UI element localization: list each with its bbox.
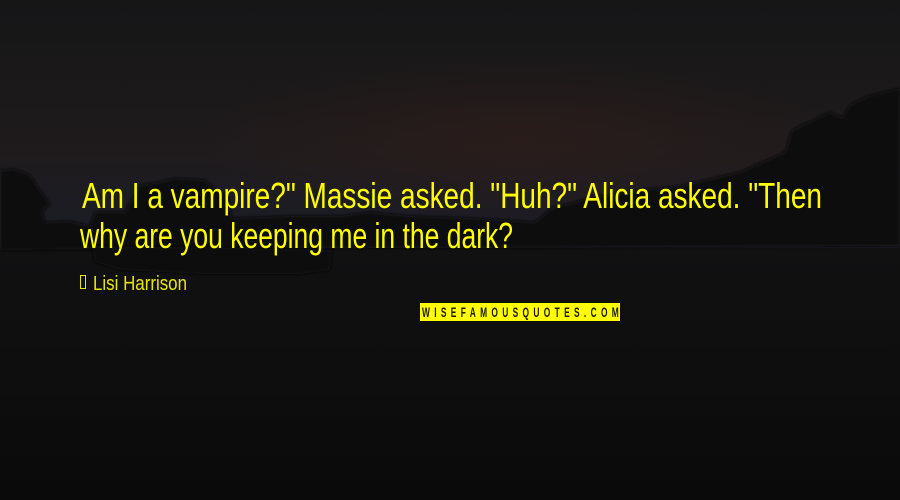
background: dark field xyxy=(0,248,900,500)
author name: Lisi Harrison xyxy=(93,273,187,295)
background: night sky xyxy=(0,0,900,250)
background: sunset glow xyxy=(150,40,900,240)
attribution xyxy=(80,273,187,295)
watermark background xyxy=(420,303,620,321)
background: dark bushes on the field xyxy=(92,246,332,274)
watermark text: WISEFAMOUSQUOTES.COM xyxy=(422,306,619,321)
background: tree line silhouette xyxy=(0,88,900,250)
watermark badge xyxy=(420,303,620,321)
attribution icon placeholder xyxy=(80,276,86,288)
quote text xyxy=(79,175,822,256)
quote line 2: why are you keeping me in the dark? xyxy=(79,215,513,256)
